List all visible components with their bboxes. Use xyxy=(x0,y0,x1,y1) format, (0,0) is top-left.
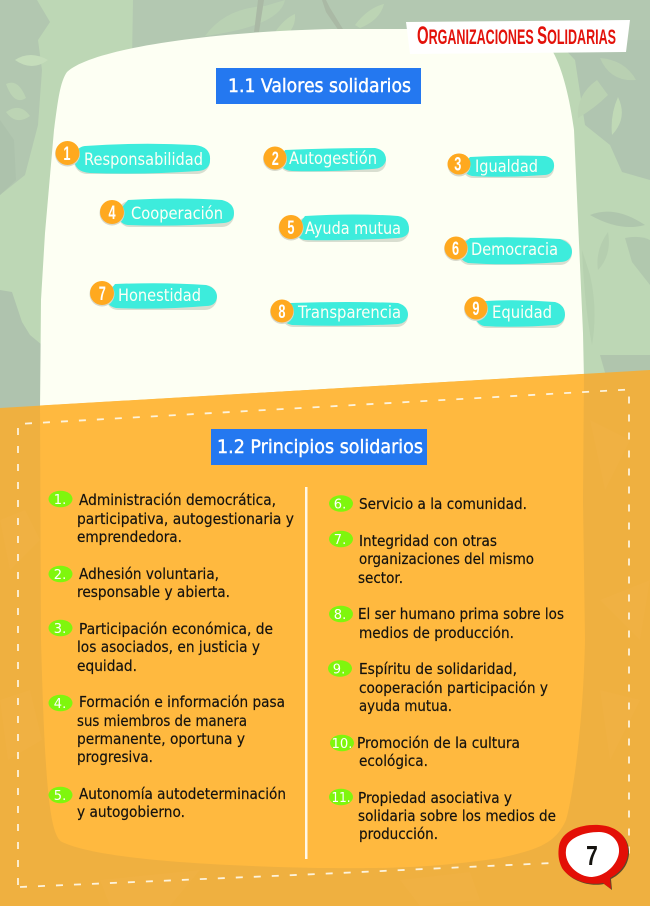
principle 9: ayuda mutua. xyxy=(359,697,452,715)
principle 9: cooperación participación y xyxy=(359,679,548,697)
value 5: Ayuda mutua: Ayuda mutua xyxy=(305,219,401,238)
value 4: Cooperación: Cooperación xyxy=(131,204,223,223)
principle 5: Autonomía autodeterminación xyxy=(79,785,286,803)
dashed border xyxy=(18,390,629,887)
principle 8: medios de producción. xyxy=(359,624,514,642)
principle 8 xyxy=(329,605,564,642)
principle 10: 10. xyxy=(332,737,352,752)
principle 5: 5. xyxy=(54,789,66,804)
principle 4 xyxy=(48,693,285,766)
value 6: Democracia xyxy=(444,236,572,265)
value 5: Ayuda mutua: 5 xyxy=(287,218,295,239)
principle 3 xyxy=(48,620,273,675)
value 8: Transparencia: Transparencia xyxy=(297,303,401,322)
values list xyxy=(55,141,572,328)
principle 11: solidaria sobre los medios de xyxy=(358,807,556,825)
principle 2: 2. xyxy=(54,568,66,583)
principle 6: Servicio a la comunidad. xyxy=(359,495,527,513)
principle 2: responsable y abierta. xyxy=(77,583,230,601)
principle 1: participativa, autogestionaria y xyxy=(77,510,294,528)
principle 7 xyxy=(329,531,534,587)
principles: right column xyxy=(328,495,564,843)
panel: orange band xyxy=(0,370,650,906)
heading: 1.2 Principios solidarios: 1.2 Principios solidarios xyxy=(217,436,423,458)
principle 3: los asociados, en justicia y xyxy=(77,638,260,656)
value 1: Responsabilidad: Responsabilidad xyxy=(84,150,203,169)
principle 2: Adhesión voluntaria, xyxy=(79,565,219,583)
page number badge xyxy=(558,825,629,890)
principle 8: 8. xyxy=(334,608,346,623)
principle 7: organizaciones del mismo xyxy=(359,550,534,568)
principle 4: progresiva. xyxy=(77,748,153,766)
value 2: Autogestión: Autogestión xyxy=(289,149,377,168)
principle 4: sus miembros de manera xyxy=(77,712,247,730)
value 1: Responsabilidad xyxy=(55,141,210,174)
principle 1: Administración democrática, xyxy=(79,491,276,509)
principle 8: El ser humano prima sobre los xyxy=(358,605,564,623)
principle 9: 9. xyxy=(333,662,345,678)
principle 10: ecológica. xyxy=(359,752,428,770)
heading: 1.1 Valores solidarios xyxy=(216,68,421,104)
principles: left column xyxy=(48,491,294,821)
value 9: Equidad xyxy=(464,296,565,328)
principle 7: sector. xyxy=(358,569,403,587)
principle 1: emprendedora. xyxy=(77,528,182,546)
value 5: Ayuda mutua xyxy=(278,214,409,242)
principle 4: permanente, oportuna y xyxy=(77,730,245,748)
value 9: Equidad: Equidad xyxy=(492,303,552,322)
principle 9: Espíritu de solidaridad, xyxy=(359,660,517,678)
principle 10 xyxy=(330,734,520,770)
principle 5 xyxy=(48,785,286,821)
principle 9 xyxy=(328,660,548,715)
principle 6: 6. xyxy=(334,498,346,512)
value 4: Cooperación: 4 xyxy=(108,203,116,224)
value 9: Equidad: 9 xyxy=(472,299,479,320)
principle 11 xyxy=(329,789,556,843)
value 1: Responsabilidad: 1 xyxy=(63,144,70,165)
value 6: Democracia: 6 xyxy=(452,239,459,260)
principle 11: Propiedad asociativa y xyxy=(358,789,512,807)
value 3: Igualdad: 3 xyxy=(454,154,461,175)
principle 3: Participación económica, de xyxy=(79,620,273,638)
heading: 1.1 Valores solidarios: 1.1 Valores solidarios xyxy=(228,75,411,97)
value 2: Autogestión: 2 xyxy=(272,149,279,170)
value 8: Transparencia: 8 xyxy=(278,302,285,323)
principle 2 xyxy=(48,565,230,601)
value 7: Honestidad: 7 xyxy=(99,284,106,305)
principle 4: Formación e información pasa xyxy=(79,693,285,711)
principle 11: producción. xyxy=(359,825,438,843)
principle 5: y autogobierno. xyxy=(77,803,185,821)
principle 7: Integridad con otras xyxy=(359,532,497,550)
value 6: Democracia: Democracia xyxy=(471,240,558,259)
panel: white rounded sheet xyxy=(40,29,584,410)
principle 7: 7. xyxy=(334,533,346,548)
value 8: Transparencia xyxy=(270,300,408,327)
heading: 1.2 Principios solidarios xyxy=(211,429,427,465)
principle 10: Promoción de la cultura xyxy=(357,734,520,752)
page number badge: 7 xyxy=(586,841,598,872)
principle 11: 11. xyxy=(332,791,350,806)
column divider xyxy=(305,487,308,859)
principle 1 xyxy=(48,491,294,546)
value 7: Honestidad xyxy=(90,281,217,310)
principle 3: equidad. xyxy=(77,657,137,675)
value 2: Autogestión xyxy=(263,146,386,172)
principle 1: 1. xyxy=(54,493,66,508)
value 3: Igualdad: Igualdad xyxy=(475,157,538,176)
value 7: Honestidad: Honestidad xyxy=(118,286,201,305)
principle 4: 4. xyxy=(54,697,66,712)
value 4: Cooperación xyxy=(100,198,234,227)
value 3: Igualdad xyxy=(448,154,554,178)
principle 3: 3. xyxy=(54,622,66,637)
